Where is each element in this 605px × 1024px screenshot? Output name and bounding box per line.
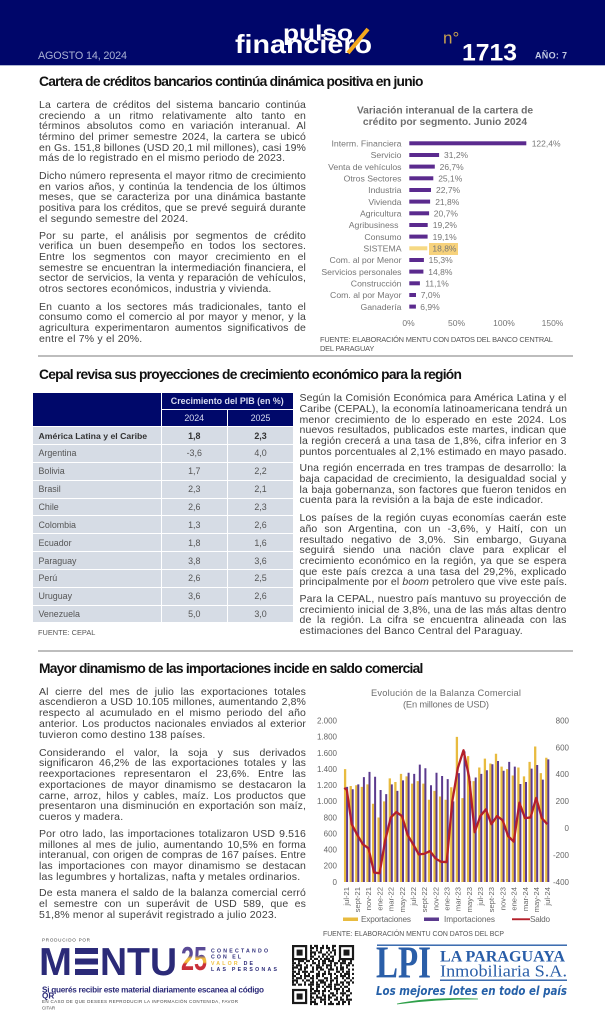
logo: pulso financiero: pulso [283,21,353,46]
legend: Exportaciones [361,915,411,924]
text block: cepal paragraph 3: resultado negativo de 3,0%. Sin embargo, Guyana [300,534,566,546]
table: crecimiento del PIB: 3,0 [254,609,267,619]
right axis [553,716,570,887]
value labels: 20,7% [434,208,458,218]
bars [409,141,526,309]
text block: cartera paragraph 1: creciendo a un ritmo relativamente alto tanto en [39,110,306,122]
text block: comercio paragraph 1: respecto al acumulado en el mismo periodo del año [39,707,306,719]
text block: cepal paragraph 4: crecimiento inicial de 3,8%, una de las más altas dentro [300,604,566,616]
text block: cepal paragraph 2: baja capacidad de crecimiento, la desigualdad social y [300,473,566,485]
category labels: Interm. Financiera [331,138,402,148]
x axis: 50% [448,318,465,328]
table: crecimiento del PIB: 3,8 [188,556,200,566]
table: crecimiento del PIB: 2,6 [254,520,267,530]
month labels: ene-24 [510,887,519,911]
logo: La Paraguaya Inmobiliaria: LPI [376,936,431,988]
tagline: LAS PERSONAS [211,967,278,973]
month labels: ene-22 [375,887,384,911]
table: crecimiento del PIB: Paraguay [38,556,76,566]
category labels: SISTEMA [363,244,402,254]
category labels: Servicio [371,150,402,160]
table: crecimiento del PIB: América Latina y el Caribe [38,431,147,441]
left axis: 600 [324,829,338,838]
month labels: may-23 [465,887,474,912]
text block: cartera paragraph 3: sector de servicios, la venta y reparación de vehículos, [39,272,306,284]
text block: cepal paragraph 3: principalmente por el boom petrolero que vive este país. [300,576,567,588]
chart title: Variación interanual de la cartera de [357,106,533,116]
table: crecimiento del PIB: Colombia [38,520,76,530]
issue number [443,28,517,67]
logo: MENTU: M [39,941,72,984]
text block: cartera paragraph 2: meses, que se caracteriza por una dinámica bastante [39,191,306,203]
text block: comercio paragraph 3: millones al mes de julio, aumentando 10,5% en forma [39,839,306,851]
month labels: sept-23 [487,887,496,912]
legend: Saldo [530,915,550,924]
text block: comercio paragraph 3: Por otro lado, las importaciones totalizaron USD 9.516 [39,828,306,840]
text block: cartera paragraph 2: Dicho número representa el mayor ritmo de crecimiento [39,170,306,182]
source: table: FUENTE: CEPAL [38,628,95,636]
month labels: jul-24 [543,887,552,907]
left axis: 1.800 [317,733,338,742]
value labels: 19,2% [433,220,457,230]
table: crecimiento del PIB: 2025 [251,413,270,423]
x axis: 150% [542,318,564,328]
category labels: Construcción [351,278,402,288]
right axis: -400 [553,878,570,887]
logo: pulso financiero: financiero [235,29,372,59]
month labels: jul-23 [476,887,485,907]
table: crecimiento del PIB: Argentina [38,448,76,458]
legend [343,915,550,924]
left axis [317,716,338,887]
category labels: Com. al por Menor [330,255,402,265]
table: crecimiento del PIB: Chile [38,502,59,512]
category labels: Consumo [364,232,402,242]
x axis: 100% [493,318,515,328]
value labels: 11,1% [425,278,449,288]
left axis: 1.000 [317,797,338,806]
table: crecimiento del PIB: 2,5 [254,573,267,583]
text block: cepal paragraph 3: Los países de la región cuyas economías caerán este [300,512,566,524]
table: crecimiento del PIB: 2,6 [188,502,200,512]
right axis: 200 [556,797,570,806]
text block: comercio paragraph 3: las legumbres y hortalizas, nafta y metales ordinarios. [39,871,300,883]
value labels: 6,9% [420,302,440,312]
issue number: n° [443,28,459,47]
footer note [42,986,264,1010]
right axis: 600 [556,743,570,752]
source: balanza chart: FUENTE: ELABORACIÓN MENTU CON DATOS DEL BCP [323,931,504,938]
text block: cepal paragraph 2 [300,462,566,506]
text block: cepal paragraph 1: puntos porcentuales al 2,1% estimado en mayo pasado. [300,446,567,458]
heading: importaciones: Mayor dinamismo de las importaciones incide en saldo comercial [39,661,423,676]
text block: comercio paragraph 3 [39,828,306,883]
logo: MENTU: PRODUCIDO POR [42,938,91,942]
value labels: 14,8% [428,267,453,277]
heading: cepal: Cepal revisa sus proyecciones de crecimiento económico para la región [39,367,461,382]
text block: cartera paragraph 1: más de lo registrado en el mismo periodo de 2023. [39,152,285,164]
heading: cartera de creditos: Cartera de créditos bancarios continúa dinámica positiva en junio [39,74,423,89]
text block: cartera paragraph 1: términos absolutos como en variación interanual. Al [39,120,306,132]
month labels: mar-24 [521,887,530,911]
exports bars [345,737,546,882]
text block: cepal paragraph 1: nuevos resultados, publicados este martes, indican que [300,424,566,436]
text block: cartera paragraph 4 [39,301,306,345]
text block: comercio paragraph 4: De esta manera el saldo de la balanza comercial cerró [39,887,306,899]
logo: La Paraguaya Inmobiliaria: LA PARAGUAYA [440,948,566,966]
footer note: EN CASO DE QUE DESEES REPRODUCIR LA INFORMACIÓN CONTENIDA, FAVOR [42,998,239,1004]
month labels: mar-22 [387,887,396,911]
month labels: nov-23 [498,887,507,910]
table: crecimiento del PIB: 1,7 [188,466,200,476]
saldo line [344,750,547,873]
value labels: 19,1% [433,232,457,242]
text block: comercio paragraph 2: significaron 46,2% de las exportaciones totales y las [39,757,306,769]
table: crecimiento del PIB: 1,8 [188,431,200,441]
value labels: 26,7% [440,162,464,172]
month labels: nov-22 [431,887,440,910]
logo: MENTU [39,938,177,984]
text block: comercio paragraph 4: 51,8% menor al superávit registrado a julio 2023. [39,909,277,921]
text block: comercio paragraph 3: las importaciones con mayor dinamismo se destacan [39,860,306,872]
logo: La Paraguaya Inmobiliaria: Los mejores lotes en todo el país [376,984,567,998]
text block: cepal paragraph 2: Una región encerrada en tres trampas de desarrollo: la [300,462,566,474]
text block: cepal paragraph 3 [300,512,567,588]
left axis: 200 [324,862,338,871]
month labels: nov-21 [364,887,373,910]
text block: comercio paragraph 2: Considerando el valor, la soja y sus derivados [39,747,306,759]
category labels: Agribusiness [349,220,399,230]
month labels: jul-22 [409,887,418,907]
table: crecimiento del PIB: 4,0 [254,448,267,458]
x axis [402,318,564,328]
category labels: Servicios personales [321,267,402,277]
text block: cartera paragraph 2: el segundo semestre del 2024. [39,213,188,225]
text block: comercio paragraph 2: presentaron una disminución en exportación son maíz, [39,800,306,812]
month labels: ene-23 [442,887,452,911]
month labels [342,887,552,912]
bar chart: variacion interanual de la cartera [321,106,564,328]
footer note: QR [42,992,54,1000]
text block: cartera paragraph 2: en varios años, y continúa la tendencia de los últimos [39,181,306,193]
source: bar chart [320,334,553,352]
tagline: VALOR DE [211,961,254,967]
text block: comercio paragraph 1: ascendieron a USD 10.105 millones, aumentando 2,8% [39,696,306,708]
table: crecimiento del PIB: 2,3 [254,502,267,512]
value labels: 15,3% [429,255,453,265]
text block: cartera paragraph 3: Entre los segmentos con mayor crecimiento en el [39,251,306,263]
value labels: 25,1% [438,174,463,184]
table: crecimiento del PIB: Perú [38,573,57,583]
text block: cartera paragraph 2: positiva para los créditos, que se prevé seguirá durante [39,202,306,214]
left axis: 1.600 [317,749,338,758]
header date: AGOSTO 14, 2024 [38,50,127,62]
text block: cartera paragraph 1: en Gs. 151,8 billones (USD 20,1 mil millones), casi 19% [39,142,306,154]
month labels: may-24 [532,887,541,912]
text block: cartera paragraph 4: agricultura experimentaron aumentos significativos de [39,322,306,334]
value labels [420,138,561,312]
left axis: 800 [324,813,338,822]
tagline: CON EL [211,955,242,961]
table: crecimiento del PIB: 2,2 [254,466,267,476]
table: crecimiento del PIB: 1,3 [188,520,200,530]
value labels: 31,2% [444,150,469,160]
table: crecimiento del PIB: Bolivia [38,466,65,476]
source: bar chart: FUENTE: ELABORACIÓN MENTU CON DATOS DEL BANCO CENTRAL [320,334,553,344]
month labels: sept-22 [420,887,429,912]
QR code [292,946,354,1004]
text block: comercio paragraph 2: cueros y madera. [39,811,123,823]
text block: comercio paragraph 2: exportaciones de mayor dinamismo se destacaron la [39,779,306,791]
category labels: Industria [368,185,402,195]
text block: cartera paragraph 1 [39,99,306,164]
table: crecimiento del PIB: 5,0 [188,609,200,619]
table: crecimiento del PIB: Ecuador [38,538,72,548]
table: crecimiento del PIB: Venezuela [38,609,80,619]
text block: cepal paragraph 3: año son Argentina, con un -3,6%, y Haití, con un [300,523,566,535]
text block: cartera paragraph 3: semestre se encuentran la intermediación financiera, el [39,262,306,274]
value labels: 122,4% [532,138,561,148]
text block: cartera paragraph 1: término del primer semestre 2024, la cartera se ubicó [39,131,306,143]
left axis: 0 [333,878,338,887]
text block: cepal paragraph 4: de la región. La cifra se encuentra alineada con las [300,614,566,626]
text block: comercio paragraph 2: carne, arroz, hilos y cables, maíz. Los productos que [39,790,306,802]
table: crecimiento del PIB: Crecimiento del PIB (en %) [171,396,284,406]
text block: cepal paragraph 2: cuenta para la revisión a la baja de este indicador. [300,494,543,506]
text block: comercio paragraph 4: el semestre con un superávit de USD 589, que es [39,898,306,910]
text block: cartera paragraph 4: entre el 7% y el 20%. [39,333,142,345]
left axis: 400 [324,846,338,855]
legend: Importaciones [444,915,495,924]
left axis: 1.400 [317,765,338,774]
table: crecimiento del PIB: 3,6 [188,591,200,601]
value labels: 7,0% [421,290,441,300]
right axis: 400 [556,770,570,779]
text block: cartera paragraph 3 [39,230,306,295]
text block: comercio paragraph 2 [39,747,306,823]
text block: cepal paragraph 1: Según la Comisión Económica para América Latina y el [300,392,566,404]
tagline: CONECTANDO [211,949,268,955]
left axis: 1.200 [317,781,338,790]
footer note: Si querés recibir este material diariamente escanea al código [42,986,264,994]
logo: MENTU: NTU [100,941,177,984]
text block: comercio paragraph 1: Al cierre del mes de julio las exportaciones totales [39,686,306,698]
logo: 25 anniversary: 25 [181,940,207,977]
month labels: may-22 [398,887,407,912]
issue number: 1713 [462,40,517,67]
table: crecimiento del PIB: Uruguay [38,591,72,601]
text block: cepal paragraph 4: estimaciones del Banco Central del Paraguay. [300,625,523,637]
table: crecimiento del PIB: 3,6 [254,556,267,566]
table: crecimiento del PIB: 2,3 [188,484,200,494]
category labels [321,138,402,312]
text block: cepal paragraph 1: menor crecimiento de lo esperado en este 2024. Los [300,414,566,426]
text block: cepal paragraph 3: crecimiento económico en la región, ya que se espera [300,555,566,567]
category labels: Otros Sectores [344,174,402,184]
sistema highlight [429,243,458,255]
table: crecimiento del PIB: 1,6 [254,538,267,548]
category labels: Agricultura [360,208,402,218]
chart title [357,106,533,128]
tagline [211,949,278,973]
text block: cepal paragraph 3: seguirá siendo una nación clave para explicar el [300,544,566,556]
chart title: crédito por segmento. Junio 2024 [363,117,527,128]
logo: La Paraguaya Inmobiliaria: Inmobiliaria S.A. [440,962,567,981]
value labels: 21,8% [435,197,460,207]
text block: cartera paragraph 1: La cartera de créditos del sistema bancario continúa [39,99,306,111]
table: crecimiento del PIB: 1,8 [188,538,200,548]
table: crecimiento del PIB: 2,6 [254,591,267,601]
right axis: 0 [565,824,570,833]
chart title: Evolución de la Balanza Comercial [371,688,521,698]
header band [0,0,605,66]
text block: comercio paragraph 4 [39,887,306,921]
chart title [371,688,521,710]
text block: cartera paragraph 4: En cuanto a los sectores más tradicionales, tanto el [39,301,306,313]
text block: comercio paragraph 2: reexportaciones representaron el 23,6%. Entre las [39,768,306,780]
table: crecimiento del PIB: 2,3 [254,431,267,441]
table: crecimiento del PIB: 2,6 [188,573,200,583]
value labels: 22,7% [436,185,461,195]
x axis: 0% [402,318,415,328]
text block: comercio paragraph 1: tuvieron como destino 138 países. [39,729,206,741]
chart title: (En millones de USD) [403,700,489,710]
text block: cartera paragraph 4: consumo como el comercio al por mayor y menor, y la [39,311,306,323]
table: crecimiento del PIB [33,393,293,622]
month labels: mar-23 [454,887,463,911]
text block: cepal paragraph 1 [300,392,567,458]
table: crecimiento del PIB: -3,6 [187,448,202,458]
text block: cepal paragraph 4: Para la CEPAL, nuestro país mantuvo su proyección de [300,593,566,605]
right axis: 800 [556,716,570,726]
text block: cepal paragraph 2: la baja gobernanza, son factores que fueron tenidos en [300,484,566,496]
text block: cartera paragraph 3: Por su parte, el análisis por segmentos de crédito [39,230,306,242]
text block: cartera paragraph 3: verifica un buen desempeño en todos los sectores. [39,240,306,252]
month labels: sept-21 [353,887,362,912]
table: crecimiento del PIB: Brasil [38,484,61,494]
text block: comercio paragraph 1: anterior. Los productos nacionales enviados al exterior [39,718,306,730]
text block: cartera paragraph 3: otros sectores económicos, industria y vivienda. [39,283,272,295]
year label: AÑO: 7 [535,51,567,61]
chart: balanza comercial [317,688,570,924]
table: crecimiento del PIB: 2024 [184,413,204,423]
left axis: 2.000 [317,716,338,726]
text block: comercio paragraph 1 [39,686,306,741]
text block: comercio paragraph 3: interanual, con origen de compras de 167 países. Entre [39,849,306,861]
month labels: jul-21 [342,887,351,907]
text block: cepal paragraph 3: que este país crezca a una tasa del 29,2%, explicado [300,566,566,578]
text block: cartera paragraph 2 [39,170,306,225]
logo: La Paraguaya Inmobiliaria [376,936,567,1004]
imports bars [347,751,548,882]
category labels: Com. al por Mayor [330,290,402,300]
text block: cepal paragraph 1: Caribe (CEPAL), la economía latinoamericana tendrá un [300,403,567,415]
value labels: 18,8% [432,244,457,254]
category labels: Ganadería [360,302,402,312]
text block: cepal paragraph 1: la región crecerá a una tasa de 1,8%, cifra inferior en 3 [300,435,566,447]
footer note: CITAR [42,1006,56,1010]
source: bar chart: DEL PARAGUAY [320,344,374,352]
text block: cepal paragraph 4 [300,593,566,637]
category labels: Venta de vehículos [328,162,402,172]
table: crecimiento del PIB: 2,1 [254,484,267,494]
category labels: Vivienda [368,197,402,207]
right axis: -200 [553,851,570,860]
